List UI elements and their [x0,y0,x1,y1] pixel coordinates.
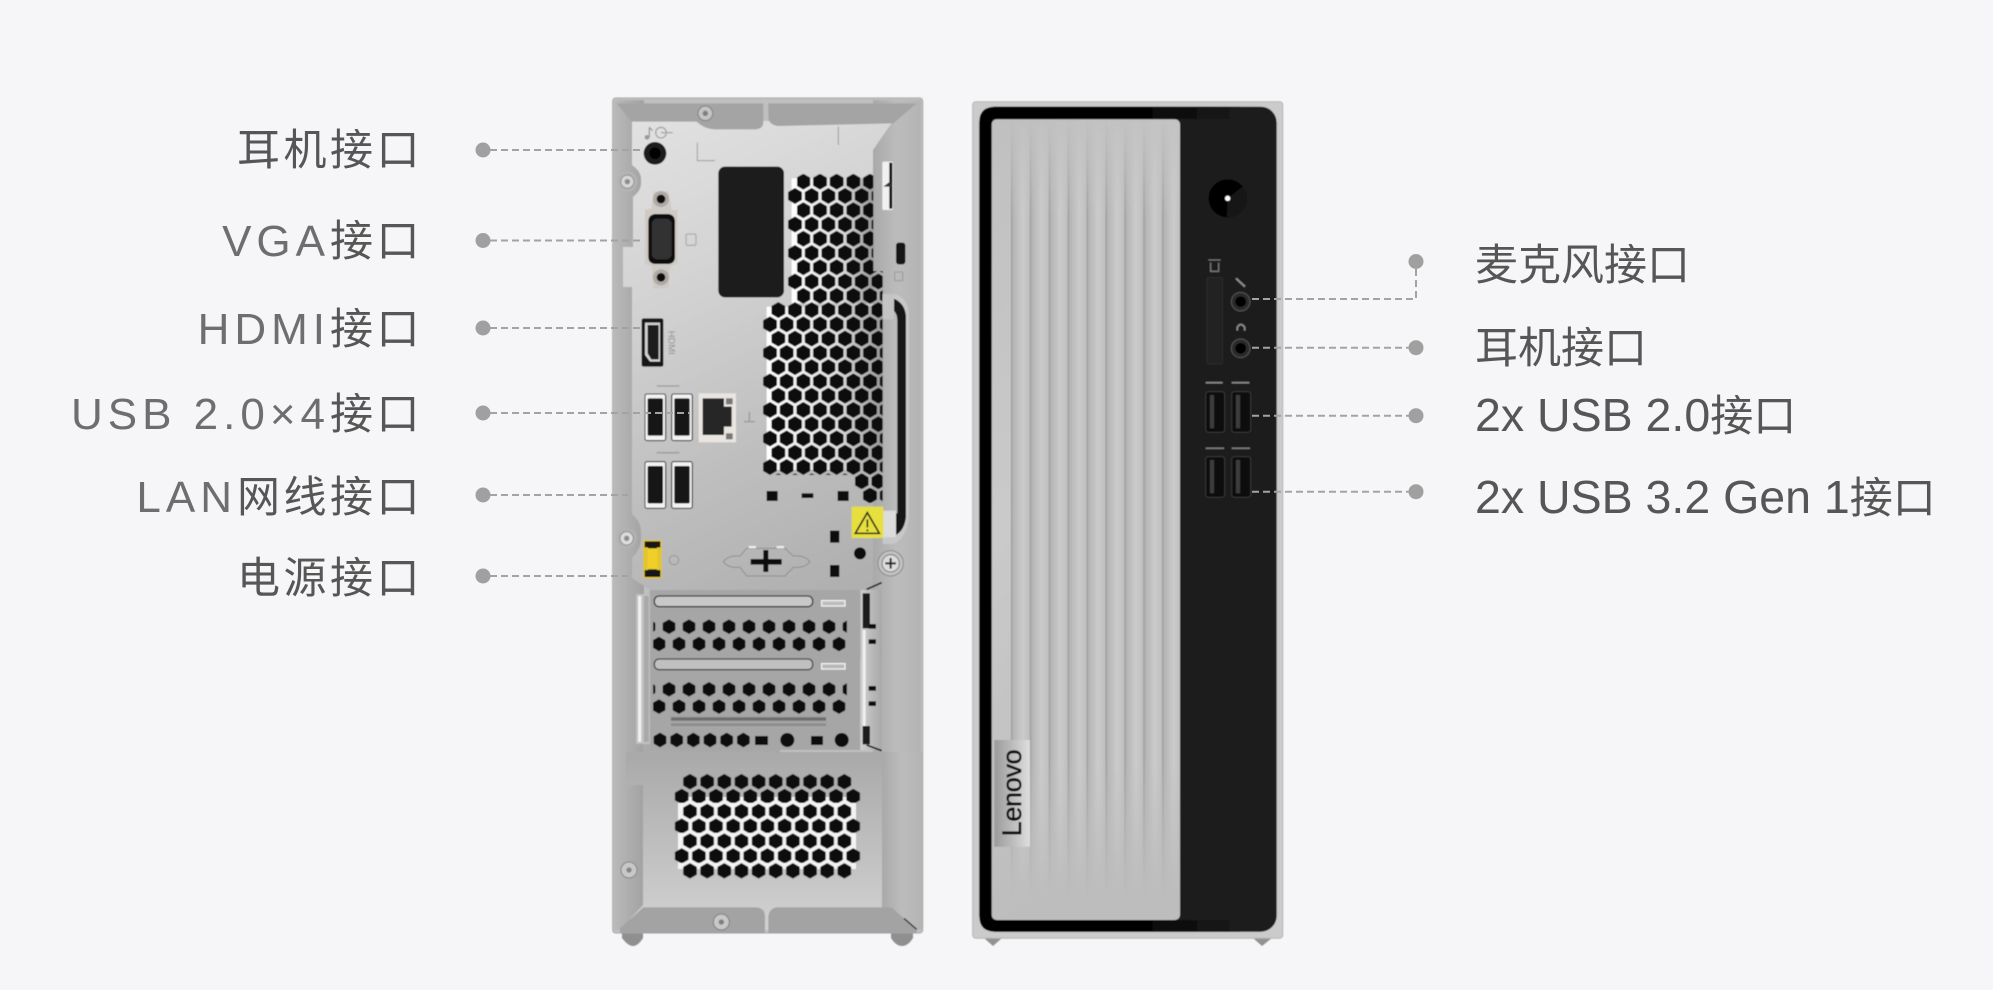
callout: front USB 3.2: 2x USB 3.2 Gen 1接口 [1475,471,1936,523]
callout: front USB 3.2 [1252,471,1936,523]
screw bottom [713,914,729,930]
screw top [698,106,713,121]
top flap right [768,103,917,126]
upper rear detail group [617,103,917,577]
PSU honeycomb [674,773,862,880]
callout: front USB 2.0 [1252,389,1796,441]
black port cover [718,167,784,297]
panel: front view of desktop tower [973,102,1283,946]
audio out jack [644,127,673,165]
power button [1209,179,1247,217]
row set A [653,618,847,635]
panel: rear view of desktop tower [613,98,923,946]
callout: front headphone [1252,325,1647,373]
HDMI port [642,318,676,367]
main metal panel [623,121,893,760]
callout: front USB 2.0: 2x USB 2.0接口 [1475,389,1796,441]
callout: microphone [1252,242,1690,299]
grooves [671,717,826,726]
callout: headphone [237,127,640,175]
microphone jack [1231,278,1250,311]
vent highlight upper [792,178,873,303]
top flap left [617,103,763,129]
Lenovo badge: Lenovo [997,750,1027,836]
USB lower pair [645,453,692,508]
warning label [852,507,883,538]
callout: headphone: 耳机接口 [237,127,423,175]
card reader slot [1207,260,1223,364]
callout: microphone: 麦克风接口 [1475,242,1690,290]
left callouts [71,127,690,603]
slot cover lower [654,659,845,670]
USB upper pair [645,386,692,441]
honeycomb vent [763,174,883,503]
right retention clip [861,583,882,751]
PCI expansion area [636,583,882,751]
front feet [984,938,1272,946]
Lenovo badge [994,740,1030,847]
callout: VGA: VGA接口 [222,217,423,266]
PCI back plate [650,590,860,750]
even rows upper [797,174,873,271]
vent highlight lower [767,307,883,470]
bottom flaps [620,862,917,933]
corner mark [697,127,838,161]
small square punch-outs [767,491,866,577]
black bezel [979,107,1277,932]
lower right band [882,752,922,930]
corner tick [904,918,917,929]
callout: USB 2.0 x4 [71,390,690,439]
left flange [614,100,644,930]
front USB 2.0 ports [1206,383,1251,432]
callout: power: 电源接口 [237,555,423,603]
round mark [669,555,679,565]
flap left [620,907,765,933]
panel face [992,119,1180,920]
slot cover upper [654,596,845,607]
callout: LAN: LAN网线接口 [136,473,423,522]
rear chassis body [613,98,923,933]
badge plate [994,740,1030,847]
HDMI port: HDMI [666,331,676,355]
callout: LAN [136,473,628,522]
callout: USB 2.0 x4: USB 2.0×4接口 [71,390,423,439]
thumbscrew [878,551,903,576]
kensington lock slot [895,243,905,281]
side handle [617,294,909,578]
screw lower left [617,528,637,548]
rear feet [622,933,913,946]
even PSU rows [682,773,852,880]
bezel dark frame [979,107,1240,932]
right callouts [1252,242,1936,523]
ribbed front panel [992,119,1180,920]
PCI vents [652,618,849,748]
PSU vent highlight [678,797,856,869]
power connector [643,540,662,578]
PSU panel [620,752,882,930]
callout: power [237,555,628,603]
right flange [873,100,921,930]
screw upper left [617,172,637,192]
front outer shell [973,102,1283,938]
VGA port [645,191,677,288]
plus cutout [723,546,810,576]
left bracket [636,594,650,744]
callout: HDMI: HDMI接口 [198,305,423,354]
screw lower panel [621,862,637,878]
LAN port [699,393,755,442]
headphone jack [1231,324,1250,358]
callout: front headphone: 耳机接口 [1475,325,1647,373]
front USB 3.2 ports [1206,448,1251,497]
callout: HDMI [198,305,642,354]
side bracket clip [882,162,893,210]
callout: VGA [222,217,640,266]
monitor mark [686,234,696,245]
